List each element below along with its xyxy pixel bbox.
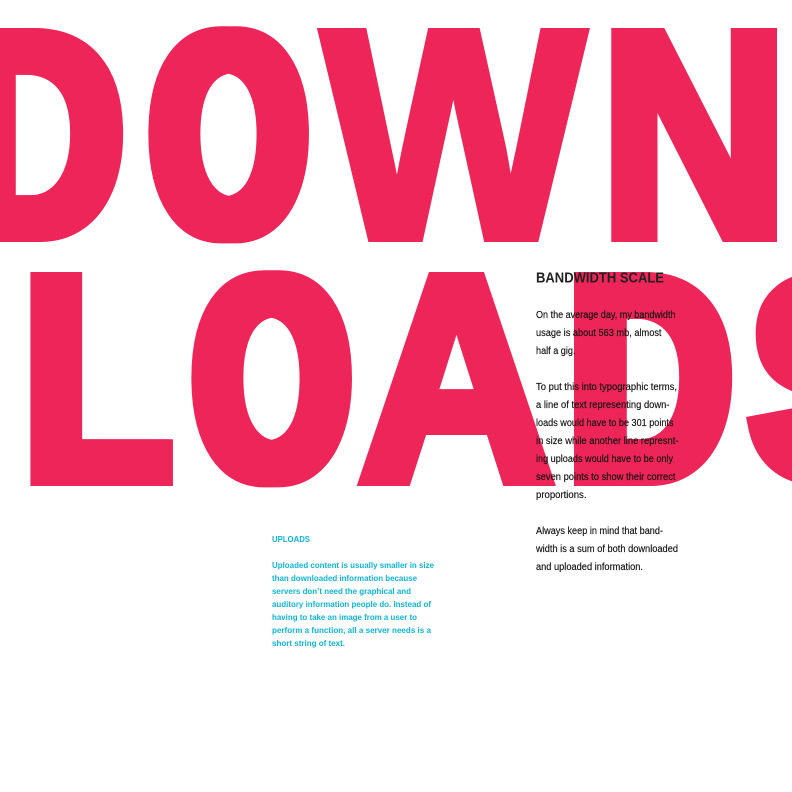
- text block: bandwidth scale body: [535, 310, 678, 573]
- text block: bandwidth scale body: width is a sum of both downloaded: [535, 544, 678, 555]
- heading: uploads: UPLOADS: [272, 535, 311, 544]
- text block: uploads body: having to take an image from a user to: [272, 613, 417, 622]
- text block: uploads body: short string of text.: [272, 639, 345, 648]
- text block: bandwidth scale body: Always keep in mind that band-: [536, 526, 663, 537]
- title: LOADS: [20, 216, 792, 541]
- title: LOADS: L: [24, 217, 174, 540]
- text block: bandwidth scale body: To put this into typographic terms,: [536, 382, 677, 393]
- text block: bandwidth scale body: ing uploads would have to be only: [536, 454, 673, 465]
- title: LOADS: D: [569, 216, 731, 540]
- text block: bandwidth scale body: half a gig.: [536, 346, 576, 357]
- title: LOADS: L: [20, 217, 170, 540]
- text block: bandwidth scale body: seven points to show their correct: [536, 472, 676, 483]
- title: LOADS: D: [574, 216, 736, 540]
- title: LOADS: D: [565, 216, 727, 540]
- title: LOADS: A: [360, 217, 553, 541]
- text block: bandwidth scale body: proportions.: [536, 490, 586, 501]
- text block: uploads body: perform a function, all a server needs is a: [272, 626, 432, 635]
- title: LOADS: O: [188, 219, 342, 539]
- title: LOADS: O: [202, 219, 355, 539]
- text block: bandwidth scale body: and uploaded information.: [536, 562, 643, 573]
- text block: bandwidth scale body: On the average day, my bandwidth: [536, 310, 676, 321]
- text block: bandwidth scale body: in size while another line represnt-: [536, 436, 678, 447]
- text block: uploads body: auditory information people do. Instead of: [272, 600, 431, 609]
- text block: uploads body: Uploaded content is usually smaller in size: [272, 561, 435, 570]
- text block: uploads body: than downloaded information because: [272, 574, 418, 583]
- text block: bandwidth scale body: loads would have to be 301 points: [536, 418, 674, 429]
- heading: bandwidth scale: BANDWIDTH SCALE: [536, 270, 664, 286]
- text block: uploads body: [272, 561, 435, 648]
- text block: uploads body: servers don’t need the graphical and: [272, 587, 411, 596]
- text block: bandwidth scale body: usage is about 563 mb, almost: [536, 328, 662, 339]
- title: LOADS: O: [195, 219, 349, 539]
- title: DOWN: [0, 0, 788, 302]
- text block: bandwidth scale body: a line of text representing down-: [536, 400, 670, 411]
